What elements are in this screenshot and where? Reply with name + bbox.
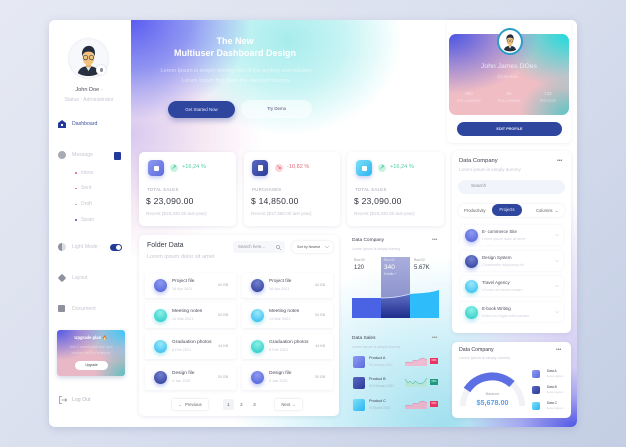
badge: message count — [114, 152, 121, 160]
chart: data company — [352, 237, 439, 318]
gauge label: Balance — [486, 392, 499, 396]
folder subheading: Lorem ipsum dolor sit amet — [147, 254, 214, 260]
legend: data C: Lorem ipsum — [547, 406, 563, 410]
product A: 02 January 2021 — [369, 362, 393, 366]
row: graduation photos 2: 44 KB — [315, 344, 325, 348]
button: previous: ← Previous — [178, 402, 202, 407]
search box — [233, 241, 285, 253]
main panel — [49, 20, 577, 427]
gauge heading: Data Company — [459, 347, 494, 353]
row: design file 2 — [242, 365, 333, 390]
product C: 07 March 2021 — [369, 406, 390, 410]
profile stats: 135 — [544, 91, 552, 96]
gauge value: $5,678.00 — [476, 398, 508, 406]
tab: projects active: Projects — [499, 207, 515, 212]
row: graduation photos — [145, 334, 236, 359]
chart heading: Data Company — [352, 238, 384, 243]
button: next: Next → — [281, 402, 296, 407]
search field — [458, 180, 565, 194]
button: next — [275, 399, 302, 410]
legend: data B — [532, 385, 563, 394]
button: get started: Get Started Now — [185, 107, 218, 112]
profile stats — [457, 91, 556, 103]
user status: Status : Administrator — [64, 97, 114, 103]
row: graduation photos: 6 Feb 2021 — [172, 348, 191, 352]
profile gradient — [449, 34, 569, 115]
row: design file: Design file — [172, 371, 194, 376]
column labels: 120 — [354, 265, 364, 271]
panel: folder data — [139, 235, 339, 416]
product B — [353, 377, 438, 389]
menu dots: ••• — [432, 237, 437, 243]
column labels: Row 02 — [414, 258, 425, 262]
product C — [353, 399, 438, 411]
row: project file 2 — [242, 273, 333, 298]
hero subtitle: Lorem Ipsum has been the standard dummy — [182, 78, 290, 84]
search field: Search — [471, 184, 486, 189]
column labels: Row 01 — [384, 258, 395, 262]
legend: data A: Lorem ipsum — [547, 374, 563, 378]
item: e-commerce site — [460, 225, 563, 245]
row: graduation photos: 44 KB — [218, 344, 228, 348]
row: graduation photos: Graduation photos — [172, 340, 211, 345]
product A: 00% — [431, 359, 436, 362]
item: e-book writing — [460, 302, 563, 322]
nav: light mode: Light Mode — [72, 244, 98, 250]
row: project file — [145, 273, 236, 298]
row: meeting notes: Meeting notes — [172, 309, 202, 314]
user name: John Doe - — [75, 87, 103, 93]
sidebar — [55, 38, 127, 404]
row: design file: 4 Jan 2021 — [172, 378, 191, 382]
row: project file 2: 44 GB — [315, 282, 325, 286]
stat value: $ 23,090.00 — [146, 196, 194, 206]
profile stats: 56 — [506, 91, 512, 96]
hero subtitle — [160, 68, 312, 84]
row: meeting notes: 34 GB — [218, 312, 228, 316]
pagination: 1 — [227, 402, 230, 407]
panel: gauge — [452, 342, 571, 418]
stat note: Recent ($19,340.00 last year) — [146, 211, 207, 216]
tabs: Columns ⌄ — [536, 208, 558, 212]
upgrade card — [57, 330, 125, 376]
column labels: 340 — [384, 264, 395, 271]
stat note: Recent ($17,980.00 last year) — [251, 211, 312, 216]
upgrade text — [69, 345, 113, 355]
stat value: $ 14,850.00 — [251, 196, 299, 206]
button: try demo: Try Demo — [267, 106, 286, 111]
hero gradient background — [131, 20, 577, 427]
item: e-commerce site: E- commerce Site — [482, 229, 517, 234]
profile stats: FOLLOWING — [498, 99, 520, 103]
row: project file 2: Project file — [269, 279, 291, 284]
icon: message — [58, 151, 66, 159]
column labels — [354, 258, 430, 276]
row: design file 2: Design file — [269, 371, 291, 376]
button: previous — [172, 399, 208, 410]
column labels: Row 00 — [354, 258, 365, 262]
icon: document — [58, 305, 65, 312]
toggle switch — [110, 244, 122, 251]
legend: data B: Data B — [547, 385, 557, 389]
submenu: inbox, sent, draft, spam — [75, 170, 94, 222]
product A: Product A — [369, 356, 385, 360]
trend arrow — [275, 164, 283, 172]
icon: dashboard home — [58, 120, 66, 128]
legend: data B: Lorem ipsum — [547, 390, 563, 394]
button: get started — [168, 101, 235, 118]
trend arrow — [378, 164, 386, 172]
item: design system — [460, 251, 563, 271]
avatar: John Doe — [69, 39, 108, 78]
sort dropdown: Sort by Newest — [297, 245, 320, 249]
item: travel agency: Ut enim ad minim veniam — [482, 288, 523, 292]
icon: layout — [58, 274, 66, 282]
trend arrow: ↗ — [171, 165, 177, 171]
panel: data company list — [452, 151, 571, 333]
stat card: total sales 2 — [347, 152, 444, 226]
row: meeting notes 2 — [242, 303, 333, 328]
nav: log out: Log Out — [72, 397, 90, 403]
product A — [353, 356, 438, 368]
product B: 04 February 2021 — [369, 384, 394, 388]
stat card: total sales — [139, 152, 236, 226]
submenu: inbox, sent, draft, spam: Sent — [81, 185, 91, 191]
row: project file: Project file — [172, 279, 194, 284]
row: meeting notes 2: Meeting notes — [269, 309, 299, 314]
gauge chart — [460, 372, 525, 406]
sort dropdown — [292, 241, 333, 253]
sales subheading: Lorem ipsum is simply dummy — [352, 345, 400, 349]
nav: layout: Layout — [72, 275, 88, 281]
item: travel agency — [460, 276, 563, 296]
avatar badge — [96, 65, 106, 75]
row: graduation photos 2: 6 Feb 2021 — [269, 348, 288, 352]
item: e-book writing: E-book Writing — [482, 306, 511, 311]
trend arrow: ↗ — [379, 165, 385, 171]
icon: log out — [59, 396, 68, 404]
row: design file 2: 30 GB — [315, 374, 325, 378]
menu dots: ••• — [557, 158, 562, 164]
stat note: Recent ($19,340.00 last year) — [354, 211, 415, 216]
row: project file: 16 Apr 2021 — [172, 286, 192, 290]
pagination: 2 — [240, 402, 243, 407]
row: meeting notes 2: 14 Mar 2021 — [269, 316, 290, 320]
trend value: +16,24 % — [390, 164, 414, 170]
stat icon — [148, 160, 164, 176]
product C: Product C — [369, 399, 386, 403]
upgrade button — [75, 361, 108, 370]
panel subheading: Lorem ipsum is simply dummy — [459, 167, 521, 172]
chart: data sales — [352, 335, 438, 411]
trend value: -10,82 % — [287, 164, 309, 170]
row: meeting notes 2: 34 GB — [315, 312, 325, 316]
tabs: Productivity — [464, 208, 486, 212]
row: design file — [145, 365, 236, 390]
row: design file 2: 4 Jan 2021 — [269, 378, 288, 382]
stat icon — [252, 160, 268, 176]
menu dots: ••• — [556, 347, 561, 353]
submenu: inbox, sent, draft, spam: Inbox — [81, 170, 93, 176]
pagination: 3 — [253, 402, 256, 407]
legend: data C — [532, 401, 563, 410]
sales heading: Data Sales — [352, 336, 375, 341]
row: meeting notes: 14 Mar 2021 — [172, 316, 193, 320]
column labels: 5.67K — [414, 265, 430, 271]
panel heading: Data Company — [459, 158, 498, 164]
stat label: TOTAL SALES — [147, 187, 179, 192]
chart subheading: Lorem ipsum is simply dummy — [352, 247, 400, 251]
button: edit profile: EDIT PROFILE — [496, 126, 523, 130]
folder heading: Folder Data — [147, 242, 184, 249]
profile stats: PHOTOS — [540, 99, 556, 103]
hero title: Multiuser Dashboard Design — [174, 48, 296, 58]
trend arrow — [170, 164, 178, 172]
product B: 00% — [431, 380, 436, 383]
icon: light mode — [58, 243, 66, 251]
stat label: TOTAL SALES — [355, 187, 387, 192]
upgrade text: explore all Pro features — [71, 351, 111, 355]
row: project file 2: 16 Apr 2021 — [269, 286, 289, 290]
upgrade button: Upgrade — [85, 363, 98, 367]
nav: dashboard: Dashboard — [72, 121, 97, 127]
item: design system: Consectetur adipiscing elit — [482, 263, 524, 267]
row: project file: 44 GB — [218, 282, 228, 286]
button: edit profile — [457, 122, 562, 136]
nav: message: Message — [72, 152, 93, 158]
menu dots: ••• — [432, 335, 437, 341]
legend: data C: Data C — [547, 401, 557, 405]
tab: projects active — [492, 204, 522, 216]
panel: profile — [447, 20, 571, 143]
hero title: The New — [216, 36, 254, 46]
product B: Product B — [369, 377, 386, 381]
submenu: inbox, sent, draft, spam: Spam — [81, 216, 94, 222]
button: try demo — [241, 100, 312, 118]
chart area — [352, 257, 439, 318]
stat card: purchases — [244, 152, 340, 226]
avatar: profile — [497, 28, 523, 55]
row: graduation photos 2 — [242, 334, 333, 359]
item: travel agency: Travel Agency — [482, 280, 510, 285]
row: design file: 30 GB — [218, 374, 228, 378]
tabs — [458, 204, 565, 217]
row: graduation photos 2: Graduation photos — [269, 340, 308, 345]
legend: data A: Data A — [547, 369, 557, 373]
gauge subheading: Lorem ipsum is simply dummy — [459, 356, 510, 360]
row: meeting notes — [145, 303, 236, 328]
item: e-commerce site: Lorem ipsum dolor sit amet — [482, 237, 525, 241]
profile stats: 903 — [465, 91, 473, 96]
profile stats: FOLLOWERS — [457, 99, 481, 103]
stat label: PURCHASES — [252, 187, 281, 192]
trend value: +16,24 % — [182, 164, 206, 170]
stat value: $ 23,090.00 — [354, 196, 402, 206]
column labels: Details + — [384, 272, 396, 276]
nav: document: Document — [72, 306, 96, 312]
trend arrow: ↘ — [276, 165, 282, 171]
item: design system: Design System — [482, 255, 512, 260]
product C: 00% — [431, 402, 436, 405]
search box: Search here... — [238, 244, 265, 249]
submenu: inbox, sent, draft, spam: Draft — [81, 201, 92, 207]
upgrade heading: Upgrade plan 🔥 — [74, 335, 108, 340]
upgrade text: Get 1 month free trial and — [69, 345, 113, 349]
item: e-book writing: Dolore eu fugiat nulla pariatur — [482, 314, 529, 318]
legend: data A — [532, 369, 563, 378]
profile name: John James DOes — [481, 63, 537, 70]
pagination — [223, 399, 256, 410]
profile handle: @johndoe... — [497, 74, 521, 79]
hero subtitle: Lorem Ipsum is simply dummy text of the printing and industry — [160, 68, 312, 74]
hero title — [174, 36, 296, 58]
stat icon — [356, 160, 372, 176]
